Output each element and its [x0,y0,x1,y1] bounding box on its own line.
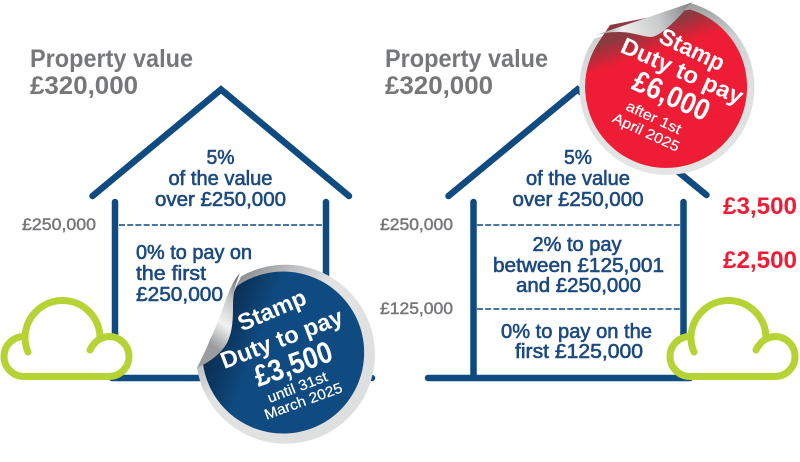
text: 2 percent band [493,234,664,297]
sticker text blue: £3,500 [250,335,337,394]
text: 5 percent band right: of the value [526,168,630,190]
amount: 2,500: £2,500 [723,247,797,274]
sticker: stamp duty 3,500 [197,265,375,444]
label: 125,000 threshold: £125,000 [380,300,453,318]
sticker text blue: Stamp [234,284,310,336]
text: 5 percent band left: over £250,000 [155,189,286,211]
sticker text blue: March 2025 [262,380,345,423]
sticker text red: £6,000 [627,65,715,128]
text: 5 percent band right [512,147,644,211]
panel: house after April 2025 [380,2,797,378]
text: 2 percent band: and £250,000 [516,275,641,297]
sticker text blue [217,284,347,423]
icon: cloud left [4,300,129,376]
sticker text red: after 1st [623,99,684,138]
panel: house before April 2025 [4,45,375,444]
sticker text red [610,23,747,156]
sticker: stamp duty 6,000 [579,2,754,175]
text: 5 percent band right: over £250,000 [512,189,644,211]
text: 0 percent band left: £250,000 [136,284,223,306]
text: 0 percent band left: 0% to pay on [136,242,252,264]
text: 0 percent band right: 0% to pay on the [501,321,652,343]
sticker text blue: until 31st [265,369,330,407]
sticker text red: Duty to pay [617,32,747,110]
heading: property value left [30,45,193,100]
text: 2 percent band: 2% to pay [532,234,622,256]
house outline left [92,90,372,378]
label: 250,000 threshold left: £250,000 [22,216,96,234]
heading: property value left: £320,000 [30,72,138,100]
sticker text red: Stamp [655,23,729,76]
heading: property value right: £320,000 [385,72,493,100]
icon: cloud right [670,300,795,376]
house outline right [428,90,706,378]
text: 0 percent band right: first £125,000 [515,341,643,363]
heading: property value left: Property value [30,45,193,73]
text: 5 percent band right: 5% [564,147,592,169]
sticker text blue: Duty to pay [217,303,347,374]
text: 0 percent band right [501,321,652,363]
text: 0 percent band left [136,242,252,306]
amount: 3,500: £3,500 [723,193,797,220]
text: 0 percent band left: the first [136,263,206,285]
heading: property value right [385,45,548,100]
text: 5 percent band left: 5% [206,147,235,169]
text: 5 percent band left: of the value [168,168,272,190]
sticker text red: April 2025 [610,111,682,156]
text: 5 percent band left [155,147,286,211]
heading: property value right: Property value [385,45,548,73]
label: 250,000 threshold right: £250,000 [380,216,453,234]
text: 2 percent band: between £125,001 [493,255,664,277]
